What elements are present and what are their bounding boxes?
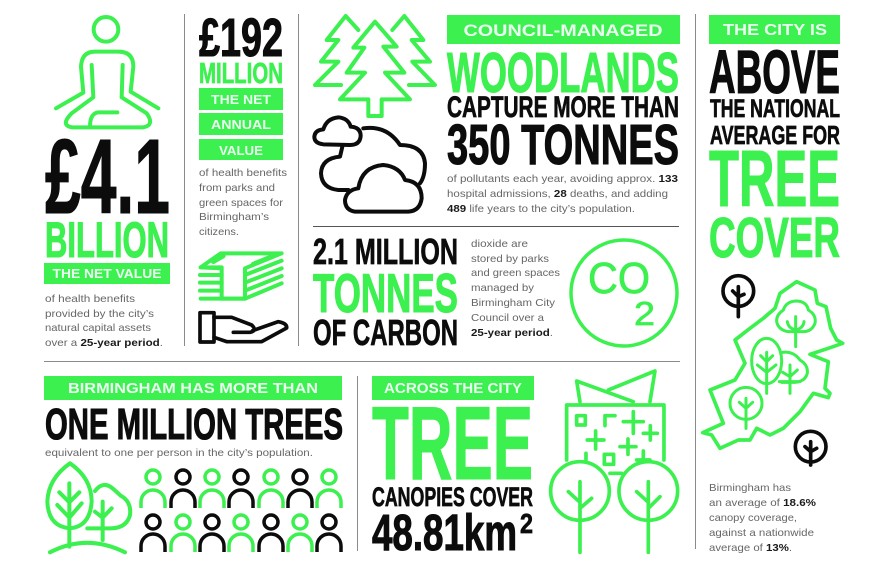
icon: clouds	[314, 117, 425, 212]
text: health benefits description: natural capital assets	[45, 322, 151, 334]
icon: meditating person	[56, 17, 158, 127]
heading: 48.81km2: 48.81km	[372, 504, 517, 561]
icon: stack of money	[200, 253, 282, 299]
label bars: the net annual value	[199, 88, 283, 160]
heading: million: MILLION	[199, 58, 283, 90]
icon: pine trees	[315, 16, 435, 116]
text: equivalent per person: equivalent to one per person in the city’s population.	[45, 447, 313, 459]
heading: woodlands: WOODLANDS	[447, 41, 679, 105]
panel: 2.1 million tonnes of carbon	[313, 231, 677, 353]
text: carbon storage description: Birmingham City	[471, 297, 556, 309]
panel: council-managed woodlands	[314, 15, 680, 215]
heading: capture more than: CAPTURE MORE THAN	[447, 91, 679, 124]
label bars: the net annual value: THE NET	[211, 93, 271, 107]
heading: £192: £192	[199, 8, 283, 68]
heading: £4.1: £4.1	[45, 118, 170, 236]
label bar: the city is	[709, 15, 840, 44]
text: parks and green spaces benefits: Birmingham’s	[199, 211, 269, 223]
text: health benefits description: over a 25-year period .	[45, 337, 163, 349]
label bar: the net value	[44, 263, 170, 284]
label bar: Birmingham has more than: BIRMINGHAM HAS MORE THAN	[68, 380, 318, 397]
panel: tree canopies cover	[372, 371, 678, 561]
icon: open hand	[200, 313, 287, 342]
text: parks and green spaces benefits: of health benefits	[199, 167, 287, 179]
icon: small tree top	[723, 276, 754, 317]
text: health benefits description: of health benefits	[45, 293, 135, 305]
icon: row of people	[141, 470, 341, 508]
panel: £192 million annual value	[199, 8, 287, 342]
text: canopy coverage: Birmingham has	[709, 482, 791, 494]
heading: one million trees: ONE MILLION TREES	[45, 400, 343, 449]
text: canopy coverage: average of 13%.	[709, 542, 792, 554]
heading: tonnes: TONNES	[313, 262, 458, 324]
panel: one million trees	[44, 376, 343, 552]
text: carbon storage description: 25-year period .	[471, 327, 553, 339]
heading: tree: TREE	[372, 386, 533, 502]
heading: canopies cover: CANOPIES COVER	[372, 482, 533, 512]
icon: trees on hill	[47, 463, 130, 552]
text: parks and green spaces benefits	[199, 167, 287, 238]
text: carbon storage description: stored by parks	[471, 253, 549, 265]
text: carbon storage description: Council over a	[471, 312, 544, 324]
icon: CO2 circle: 2	[634, 295, 655, 332]
text: pollutants description: 489 life years to the city’s population.	[447, 203, 635, 215]
icon: small tree bottom	[795, 431, 826, 465]
text: parks and green spaces benefits: from parks and	[199, 182, 275, 194]
text: canopy coverage: canopy coverage,	[709, 512, 797, 524]
label bars: the net annual value: VALUE	[219, 144, 263, 158]
panel: £4.1 billion net value	[44, 17, 170, 349]
icon: CO2 circle: CO	[588, 254, 650, 303]
icon: CO2 circle	[571, 240, 677, 346]
label bar: council-managed	[447, 15, 680, 44]
text: carbon storage description: managed by	[471, 282, 535, 294]
icon: map with trees	[551, 371, 678, 552]
text: parks and green spaces benefits: citizens.	[199, 226, 239, 238]
heading: of carbon: OF CARBON	[313, 312, 458, 353]
text: canopy coverage: against a nationwide	[709, 527, 814, 539]
text: health benefits description	[45, 293, 163, 349]
icon: second row of people	[141, 515, 341, 552]
label bar: across the city: ACROSS THE CITY	[384, 381, 522, 397]
label bar: the net value: THE NET VALUE	[52, 267, 162, 281]
label bar: Birmingham has more than	[44, 376, 342, 400]
label bar: across the city	[372, 376, 534, 400]
text: carbon storage description: and green spaces	[471, 267, 560, 279]
text: carbon storage description	[471, 238, 560, 339]
text: carbon storage description: dioxide are	[471, 238, 528, 250]
heading: 350 tonnes: 350 TONNES	[447, 113, 679, 177]
text: canopy coverage	[709, 482, 817, 554]
heading: billion: BILLION	[45, 212, 169, 268]
heading: 2.1 million: 2.1 MILLION	[313, 231, 458, 272]
text: pollutants description: hospital admissions, 28 deaths, and adding	[447, 188, 668, 200]
text: pollutants description	[447, 173, 678, 215]
panel: above the national average	[703, 15, 843, 554]
label bar: the city is: THE CITY IS	[723, 22, 827, 39]
text: canopy coverage: an average of 18.6%	[709, 497, 817, 509]
icon: Birmingham map with trees	[703, 282, 843, 448]
text: pollutants description: of pollutants each year, avoiding approx. 133	[447, 173, 678, 185]
text: parks and green spaces benefits: green spaces for	[199, 197, 284, 209]
text: health benefits description: provided by the city’s	[45, 308, 154, 320]
label bars: the net annual value: ANNUAL	[211, 118, 271, 132]
label bar: council-managed: COUNCIL-MANAGED	[464, 21, 662, 40]
heading: 48.81km2: 2	[520, 508, 533, 539]
